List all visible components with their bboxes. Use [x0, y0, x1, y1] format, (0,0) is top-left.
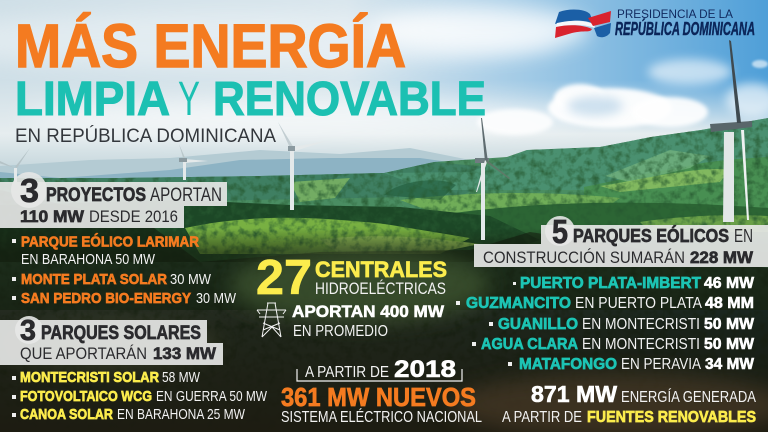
panel: 27 centrales hidroeléctricas: HIDROELÉCTRICAS	[315, 279, 446, 298]
green hills	[0, 118, 768, 342]
list: parques eólicos: PUERTO PLATA-IMBERT	[520, 275, 701, 292]
panel: a partir de 2018: A PARTIR DE	[305, 364, 389, 381]
callout: 871 MW fuentes renovables	[502, 381, 756, 426]
list: parques solares: EN GUERRA 50 MW	[156, 389, 267, 405]
list: proyectos: 30 MW	[196, 290, 237, 307]
panel: a partir de 2018: 2018	[394, 356, 456, 383]
list: parques eólicos: 50 MW	[704, 336, 755, 353]
list: parques eólicos: MATAFONGO	[519, 356, 617, 373]
callout: 871 MW fuentes renovables: A PARTIR DE	[502, 409, 582, 426]
list: proyectos	[12, 232, 237, 307]
heading: 3 parques solares: 3	[20, 315, 36, 347]
list: parques eólicos: 48 MM	[705, 295, 754, 312]
list: parques eólicos: EN MONTECRISTI	[582, 336, 700, 353]
icon: transmission tower	[257, 303, 286, 337]
heading: 3 proyectos aportan: PROYECTOS	[46, 185, 146, 206]
list: proyectos: EN BARAHONA 50 MW	[21, 251, 156, 268]
dark foreground	[0, 228, 768, 432]
list: parques eólicos: 46 MW	[704, 275, 755, 292]
list: parques eólicos: AGUA CLARA	[481, 336, 578, 353]
panel: 3 parques solares	[0, 315, 267, 423]
list: parques solares: 58 MW	[162, 370, 200, 386]
list: parques solares: CANOA SOLAR	[20, 407, 113, 423]
panel: 27 centrales hidroeléctricas: 27	[256, 251, 312, 305]
icon: flag	[555, 10, 611, 38]
title	[15, 12, 486, 147]
panel: 27 centrales hidroeléctricas: EN PROMEDIO	[293, 323, 388, 340]
heading: 3 proyectos aportan	[0, 172, 227, 228]
panel: 27 centrales hidroeléctricas	[256, 251, 447, 340]
list: proyectos: SAN PEDRO BIO-ENERGY	[21, 290, 191, 307]
list: proyectos: MONTE PLATA SOLAR	[21, 271, 167, 288]
title: LIMPIA	[15, 73, 170, 126]
title: MÁS ENERGÍA	[15, 12, 406, 80]
panel: 3 proyectos	[0, 172, 237, 307]
panel: 5 parques eólicos	[456, 213, 768, 373]
heading: 5 parques eólicos: 228 MW	[690, 248, 754, 267]
list: parques eólicos: GUANILLO	[498, 316, 578, 333]
panel: a partir de 2018: SISTEMA ELÉCTRICO NACIONAL	[281, 409, 482, 426]
heading: 5 parques eólicos: CONSTRUCCIÓN SUMARÁN	[483, 248, 685, 267]
heading: 5 parques eólicos: EN	[734, 225, 753, 246]
list: parques solares: FOTOVOLTAICO WCG	[20, 389, 152, 405]
list: parques solares: MONTECRISTI SOLAR	[20, 370, 159, 386]
callout: 871 MW fuentes renovables: 871 MW	[531, 381, 617, 407]
logo: Presidencia de la República Dominicana: PRESIDENCIA DE LA	[617, 9, 733, 21]
heading: 5 parques eólicos: PARQUES EÓLICOS	[573, 225, 729, 246]
logo: Presidencia de la República Dominicana	[555, 9, 755, 39]
heading: 3 proyectos aportan: APORTAN	[150, 185, 222, 206]
title: RENOVABLE	[213, 73, 486, 126]
heading: 3 parques solares: PARQUES SOLARES	[41, 323, 201, 344]
list: parques eólicos	[456, 275, 755, 373]
heading: 3 parques solares: 133 MW	[153, 344, 217, 363]
heading: 5 parques eólicos: 5	[552, 213, 568, 250]
heading: 3 proyectos aportan: DESDE 2016	[89, 207, 178, 226]
list: parques eólicos: EN PUERTO PLATA	[575, 295, 702, 312]
panel: 27 centrales hidroeléctricas: APORTAN 400 MW	[292, 302, 445, 321]
list: parques eólicos: EN PERAVIA	[621, 356, 701, 373]
list: proyectos: 30 MW	[170, 271, 212, 288]
heading: 5 parques eólicos	[474, 213, 768, 267]
distant mountains	[0, 148, 540, 240]
list: parques eólicos: 34 MW	[705, 356, 755, 373]
panel: a partir de 2018: 361 MW NUEVOS	[281, 382, 476, 412]
wind turbines	[0, 40, 752, 240]
list: proyectos: PARQUE EÓLICO LARIMAR	[21, 232, 199, 250]
panel: 27 centrales hidroeléctricas: CENTRALES	[315, 257, 447, 282]
title: EN REPÚBLICA DOMINICANA	[15, 124, 276, 147]
list: parques eólicos: 50 MW	[704, 316, 755, 333]
panel: a partir de 2018	[281, 356, 482, 426]
heading: 3 proyectos aportan: 3	[20, 172, 39, 209]
heading: 3 proyectos aportan: 110 MW	[20, 207, 85, 226]
list: parques solares	[12, 370, 267, 423]
list: parques eólicos: EN MONTECRISTI	[582, 316, 700, 333]
list: parques solares: EN BARAHONA 25 MW	[117, 407, 245, 423]
title: Y	[178, 73, 200, 126]
heading: 3 parques solares: QUE APORTARÁN	[20, 344, 147, 363]
list: parques eólicos: GUZMANCITO	[466, 295, 571, 312]
heading: 3 parques solares	[0, 315, 223, 365]
